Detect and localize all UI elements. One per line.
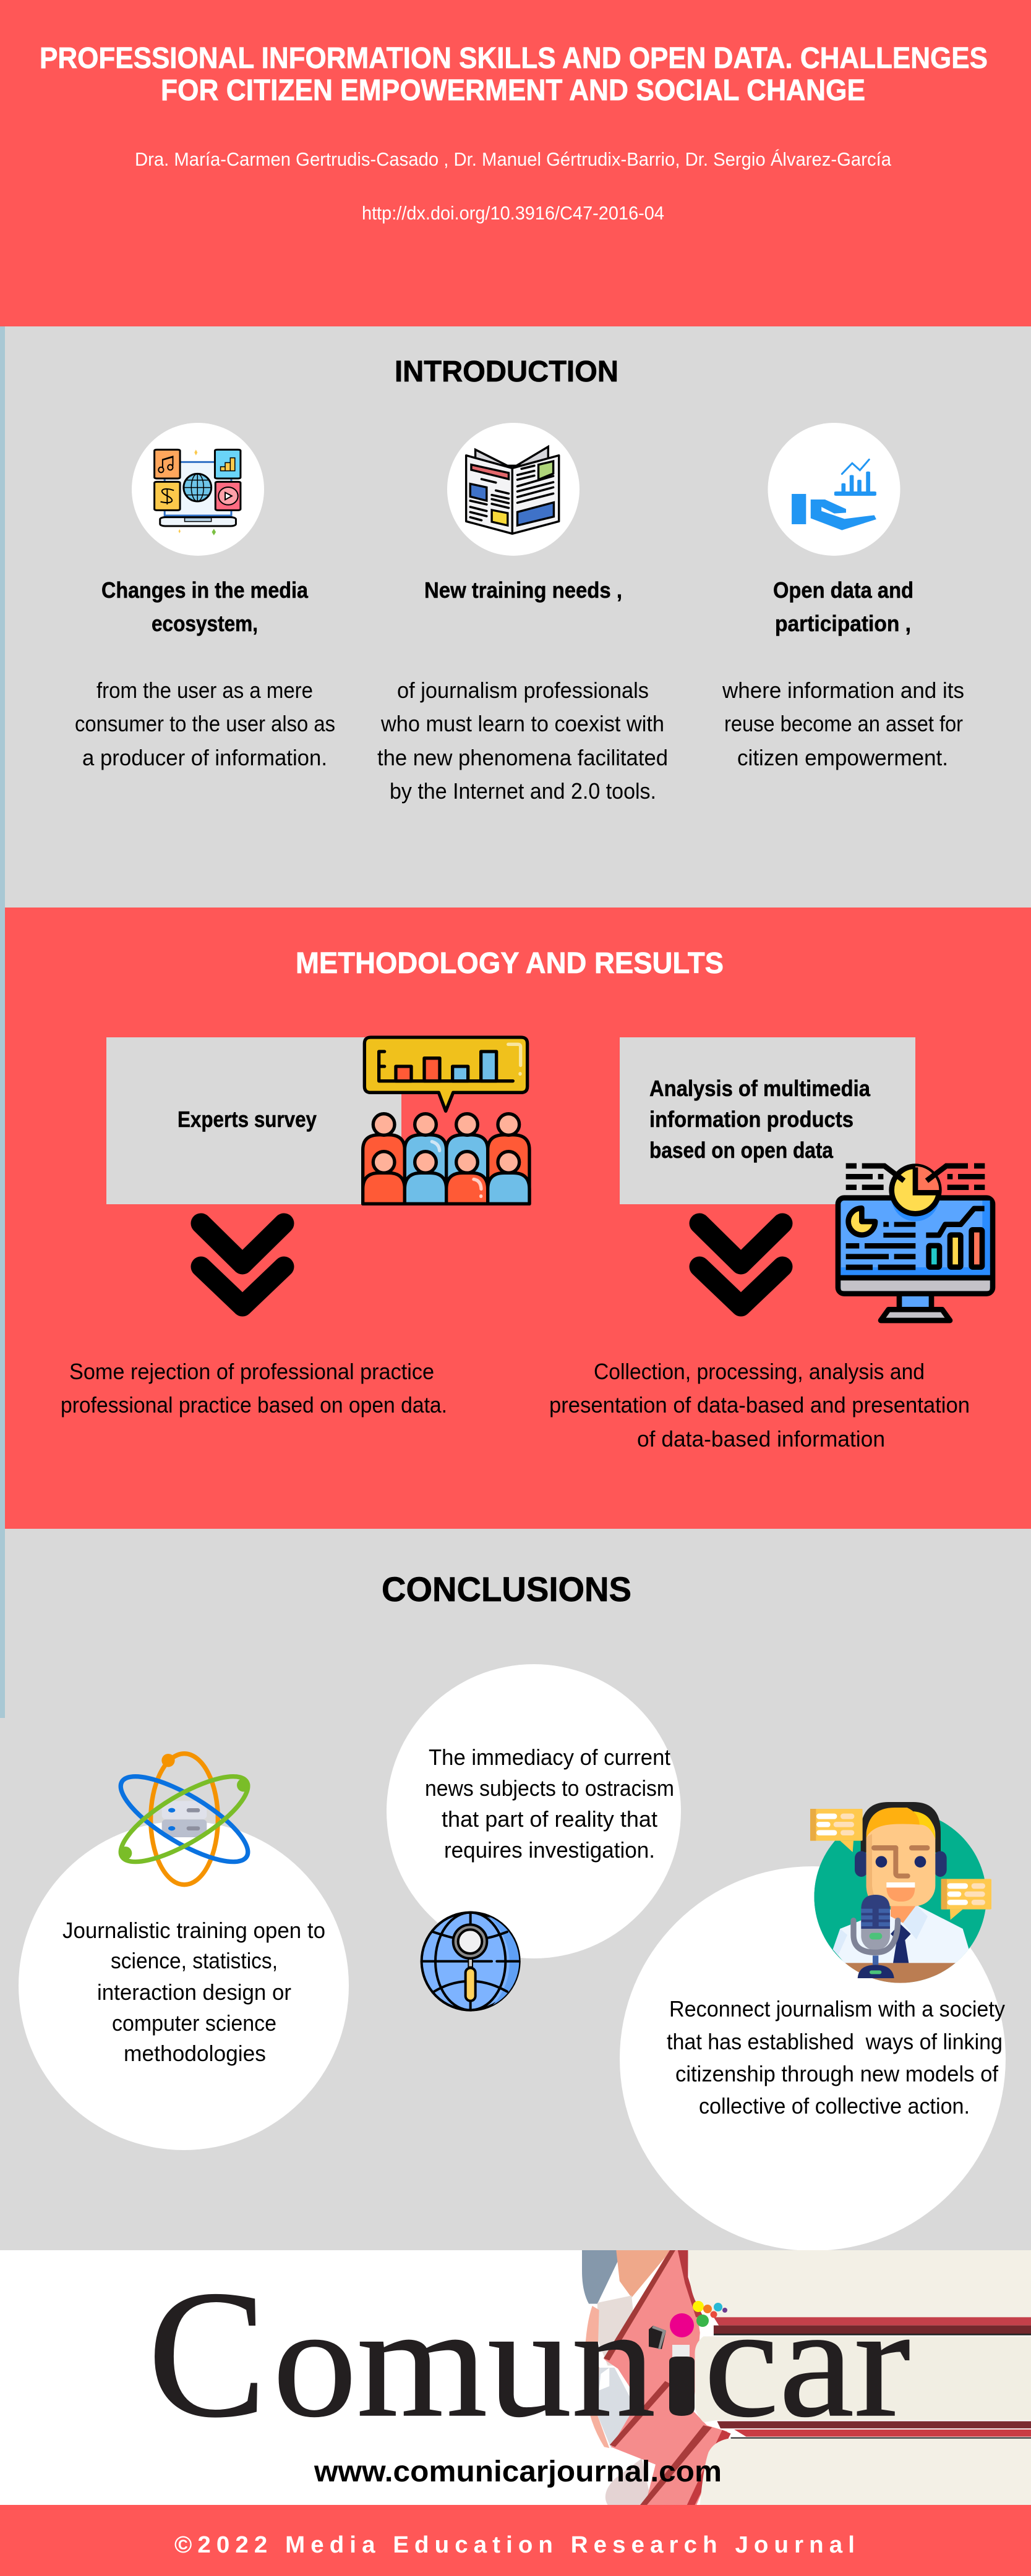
bubble: immediacy of news xyxy=(387,1664,681,1958)
bubble: reconnect journalism: Reconnect journalism with a society xyxy=(669,1996,1005,2021)
illustration: stacked books xyxy=(582,2250,1031,2505)
text: copyright: ©2022 Media Education Research Journal xyxy=(174,2532,860,2558)
text: changes in the media ecosystem: consumer to the user also as xyxy=(75,711,335,736)
text: survey result: Some rejection of professional practice xyxy=(69,1359,434,1384)
logo: Comunicar: car xyxy=(704,2273,910,2450)
logo: Comunicar: C xyxy=(148,2253,267,2455)
logo: Comunicar: omun xyxy=(273,2273,656,2450)
bubble: journalistic training: science, statistics, xyxy=(111,1948,278,1973)
doi link: http://dx.doi.org/10.3916/C47-2016-04 xyxy=(362,202,664,224)
arrow: right double chevron xyxy=(699,1223,782,1306)
panel: introduction xyxy=(75,355,964,804)
icon: audience with chart bubble xyxy=(363,1037,529,1204)
text: open data and participation: reuse become an asset for xyxy=(724,711,963,736)
text: analysis result: presentation of data-based and presentation xyxy=(549,1392,970,1418)
text: changes in the media ecosystem: Changes in the media xyxy=(101,577,309,603)
text: open data and participation: Open data and xyxy=(773,577,913,603)
bubble: journalistic training: methodologies xyxy=(124,2041,266,2066)
text: analysis result: Collection, processing, analysis and xyxy=(594,1359,925,1384)
heading: introduction: INTRODUCTION xyxy=(395,355,618,388)
bubble: reconnect journalism xyxy=(620,1866,1006,2251)
title xyxy=(40,42,988,107)
panel: conclusions xyxy=(19,1570,1006,2251)
text: journal website: www.comunicarjournal.com xyxy=(314,2455,722,2488)
box: experts survey: Experts survey xyxy=(178,1107,317,1132)
panel: header xyxy=(0,0,1031,326)
icon: media ecosystem xyxy=(132,423,264,556)
text: survey result: professional practice based on open data. xyxy=(61,1392,447,1418)
box: multimedia analysis xyxy=(620,1037,915,1204)
text: new training needs: the new phenomena facilitated xyxy=(377,745,668,770)
text: new training needs: of journalism professionals xyxy=(397,678,649,703)
icon: globe with magnifier xyxy=(422,1913,520,2010)
box: experts survey xyxy=(106,1037,401,1204)
title: FOR CITIZEN EMPOWERMENT AND SOCIAL CHANGE xyxy=(161,74,865,107)
bubble: journalistic training: computer science xyxy=(112,2010,276,2036)
bubble: reconnect journalism: citizenship through new models of xyxy=(675,2061,999,2086)
panel: footer xyxy=(0,2505,1031,2576)
text: open data and participation xyxy=(722,577,964,770)
bubble: immediacy of news: requires investigation. xyxy=(444,1837,655,1863)
bubble: journalistic training: interaction design or xyxy=(97,1979,291,2005)
bubble: reconnect journalism: that has established ways of linking xyxy=(667,2029,1003,2054)
bubble: journalistic training xyxy=(19,1821,349,2150)
box: multimedia analysis: information products xyxy=(649,1107,853,1132)
text: open data and participation: where information and its xyxy=(722,678,964,703)
icon: hand with chart xyxy=(768,423,901,556)
text: changes in the media ecosystem: ecosystem, xyxy=(152,611,258,636)
arrow: left double chevron xyxy=(201,1223,284,1306)
icon: newspaper xyxy=(447,423,580,556)
text: analysis result: of data-based information xyxy=(637,1426,885,1452)
text: analysis result xyxy=(549,1359,970,1452)
box: multimedia analysis: Analysis of multimedia xyxy=(649,1076,871,1101)
bubble: immediacy of news: news subjects to ostracism xyxy=(425,1775,674,1801)
panel: left accent strip xyxy=(0,326,5,1718)
text: new training needs: New training needs , xyxy=(424,577,622,603)
text: new training needs: who must learn to coexist with xyxy=(380,711,664,736)
bubble: immediacy of news: The immediacy of current xyxy=(429,1745,670,1770)
bubble: immediacy of news: that part of reality that xyxy=(442,1806,657,1832)
text: open data and participation: participation , xyxy=(775,611,911,636)
text: new training needs xyxy=(377,577,668,804)
text: new training needs: by the Internet and 2.0 tools. xyxy=(390,778,656,804)
heading: conclusions: CONCLUSIONS xyxy=(382,1570,631,1609)
panel: methodology and results xyxy=(5,908,1031,1529)
bubble: reconnect journalism: collective of collective action. xyxy=(699,2093,970,2119)
text: changes in the media ecosystem: a producer of information. xyxy=(82,745,327,770)
bubble: journalistic training: Journalistic training open to xyxy=(62,1918,325,1943)
icon: radio presenter with microphone xyxy=(810,1802,991,1986)
text: open data and participation: citizen empowerment. xyxy=(737,745,948,770)
box: multimedia analysis: based on open data xyxy=(649,1137,834,1163)
icon: monitor dashboard xyxy=(838,1163,993,1320)
panel: journal branding band xyxy=(0,2250,1031,2505)
text: survey result xyxy=(61,1359,447,1418)
text: changes in the media ecosystem xyxy=(75,577,335,770)
authors: Dra. María-Carmen Gertrudis-Casado , Dr. Manuel Gértrudix-Barrio, Dr. Sergio Álvarez-García xyxy=(135,148,892,170)
icon: atom with server xyxy=(109,1754,259,1885)
text: changes in the media ecosystem: from the user as a mere xyxy=(96,678,313,703)
heading: methodology and results: METHODOLOGY AND RESULTS xyxy=(296,947,724,980)
logo: Comunicar xyxy=(148,2253,910,2455)
